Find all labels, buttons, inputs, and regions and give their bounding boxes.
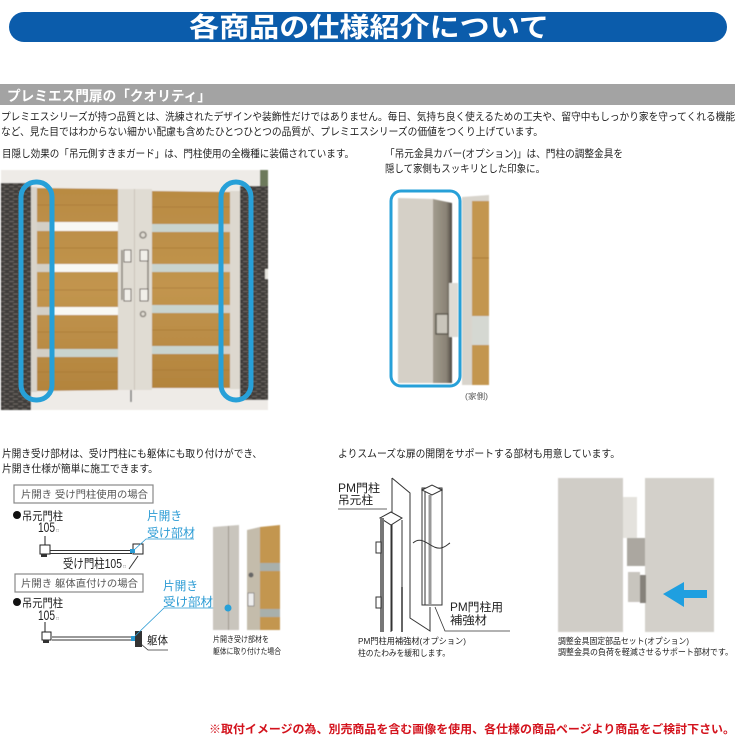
highlight: left gap guard (21, 182, 52, 400)
diagram: direct to wall: □ (56, 616, 59, 622)
diagram: direct to wall: 片開き 躯体直付けの場合 (21, 577, 138, 590)
section heading: quality: プレミエス門扉の「クオリティ」 (7, 88, 211, 104)
caption: single swing receiver: 片開き受け部材は、受け門柱にも躯体にも取り付けができ、 (2, 447, 262, 460)
caption: gap guard: 目隠し効果の「吊元側すきまガード」は、門柱使用の全機種に装備されています。 (2, 147, 354, 160)
caption: hinge cover (385, 147, 623, 175)
label: house side: (家側) (465, 391, 488, 401)
diagram: receiving post: □ (56, 528, 59, 534)
diagram: direct to wall: 躯体 (147, 633, 168, 647)
diagram: PM post reinforcement: 補強材 (450, 613, 488, 627)
diagram: direct to wall: 吊元門柱 (22, 596, 63, 610)
diagram: receiving post (13, 485, 195, 571)
caption: hinge fixing set: 調整金具の負荷を軽減させるサポート部材です。 (558, 647, 733, 657)
intro paragraph (1, 110, 735, 138)
title banner (9, 12, 727, 43)
caption: hinge fixing set: 調整金具固定部品セット(オプション) (558, 636, 689, 646)
caption: hinge cover: 「吊元金具カバー(オプション)」は、門柱の調整金具を (385, 147, 623, 160)
highlight: right gap guard (221, 182, 251, 400)
photo: double gate front (1, 170, 268, 410)
diagram: direct to wall (13, 574, 228, 650)
photo: hinge fixing set (558, 478, 714, 632)
diagram: receiving post: 105 (38, 519, 55, 535)
diagram: PM post reinforcement: 吊元柱 (338, 493, 374, 507)
diagram: receiving post: 受け部材 (147, 526, 195, 540)
caption: reinforcement: 柱のたわみを緩和します。 (358, 648, 450, 658)
diagram: receiving post: 受け門柱105 (63, 557, 122, 571)
caption: single swing receiver (2, 447, 262, 475)
caption: smooth opening parts: よりスムーズな扉の開閉をサポートする部材も用意しています。 (338, 447, 620, 460)
intro paragraph: など、見た目ではわからない細かい配慮も含めたひとつひとつの品質が、プレミエスシリーズの価値をつくり上げています。 (1, 125, 543, 138)
diagram: receiving post: 吊元門柱 (22, 509, 63, 523)
photo: hinge cover (391, 191, 489, 386)
diagram: receiving post: 片開き 受け門柱使用の場合 (21, 488, 148, 501)
caption: reinforcement: PM門柱用補強材(オプション) (358, 636, 466, 646)
footnote: ※取付イメージの為、別売商品を含む画像を使用、各仕様の商品ページより商品をご検討下さい。 (209, 722, 735, 736)
diagram: PM post reinforcement (338, 478, 510, 632)
diagram: direct to wall: 受け部材 (163, 595, 213, 609)
diagram: PM post reinforcement: PM門柱 (338, 481, 381, 495)
diagram: receiving post: 片開き (147, 509, 182, 523)
photo: receiver on wall (213, 525, 280, 630)
highlight: hinge cover (391, 191, 460, 386)
caption: single swing receiver: 片開き仕様が簡単に施工できます。 (2, 462, 158, 475)
icon: blue arrow (663, 582, 707, 607)
title banner: 各商品の仕様紹介について (189, 13, 549, 43)
diagram: direct to wall: 105 (38, 607, 55, 623)
caption: receiver photo: 躯体に取り付けた場合 (213, 646, 281, 656)
caption: receiver photo (213, 634, 281, 656)
section heading: quality (0, 84, 735, 105)
diagram: receiving post: □ (123, 564, 126, 570)
caption: reinforcement (358, 636, 466, 658)
caption: receiver photo: 片開き受け部材を (213, 634, 269, 644)
diagram: PM post reinforcement: PM門柱用 (450, 600, 503, 614)
caption: hinge cover: 隠して家側もスッキリとした印象に。 (385, 162, 545, 175)
caption: hinge fixing set (558, 636, 733, 657)
diagram: direct to wall: 片開き (163, 579, 198, 593)
